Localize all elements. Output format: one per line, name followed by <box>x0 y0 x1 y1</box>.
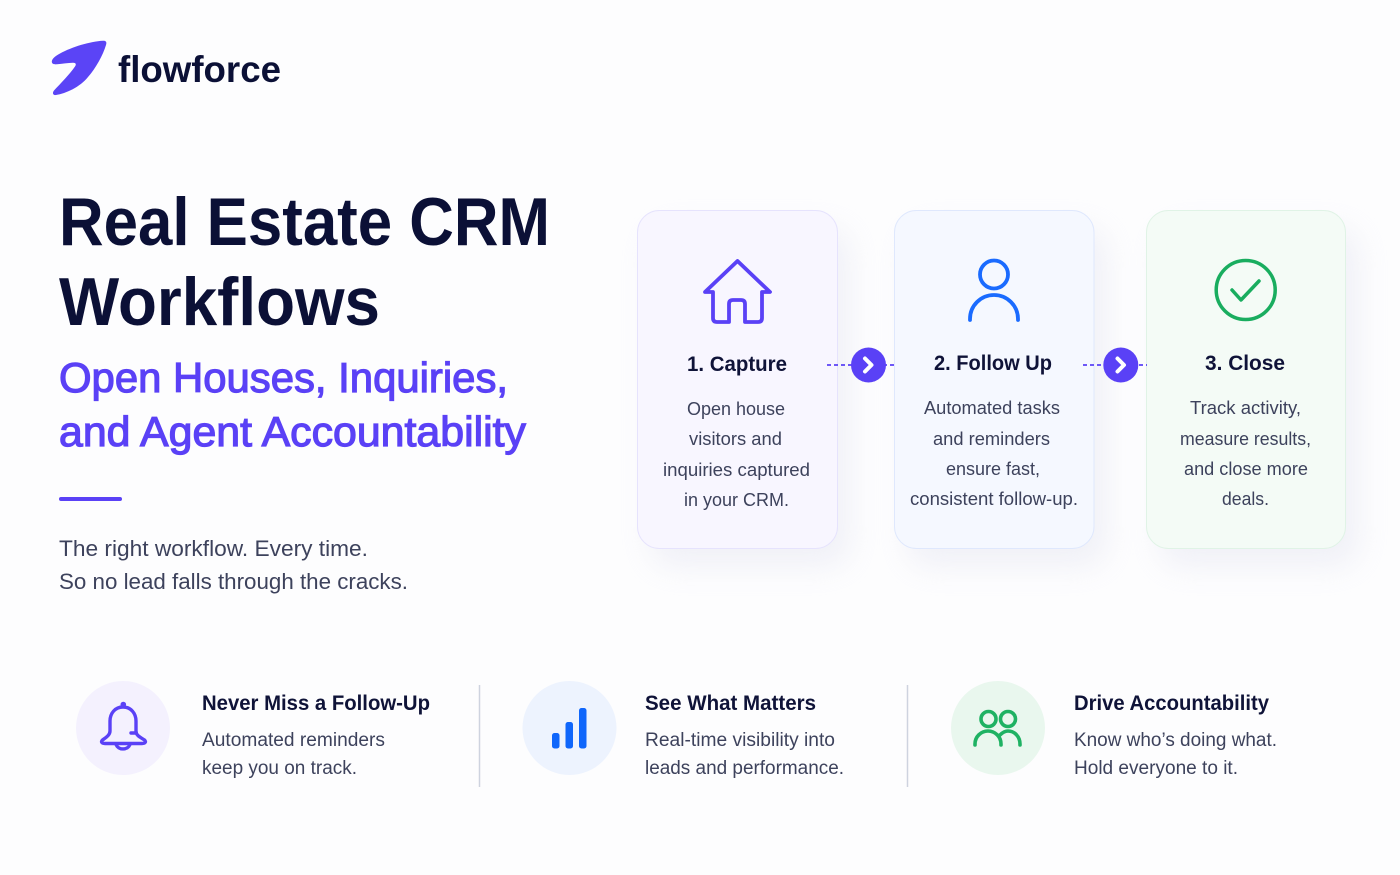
body text: Hold everyone to it. <box>1074 758 1238 779</box>
body text: ensure fast, <box>946 458 1040 479</box>
heading: Never Miss a Follow-Up <box>202 692 430 715</box>
body text: Automated reminders <box>202 730 385 751</box>
tagline: So no lead falls through the cracks. <box>59 569 408 594</box>
body text: and close more <box>1184 458 1308 479</box>
tagline <box>59 536 408 594</box>
benefit: See What Matters <box>522 681 844 779</box>
icon: bell <box>76 681 170 775</box>
body text <box>663 398 810 510</box>
tagline: The right workflow. Every time. <box>59 536 368 561</box>
panel: 3. Close <box>1146 210 1359 567</box>
panel: 1. Capture <box>638 210 850 567</box>
logo: flowforce <box>52 41 281 95</box>
body text: keep you on track. <box>202 758 357 779</box>
body text: leads and performance. <box>645 758 844 779</box>
icon: house <box>705 261 770 322</box>
panel: 2. Follow Up <box>894 210 1107 567</box>
body text: inquiries captured <box>663 459 810 480</box>
body text: in your CRM. <box>684 489 789 510</box>
body text <box>910 397 1078 509</box>
title <box>59 184 550 340</box>
body text: Know who’s doing what. <box>1074 730 1277 751</box>
body text: visitors and <box>689 428 782 449</box>
title: Real Estate CRM <box>59 184 550 260</box>
heading: 1. Capture: 1. Capture <box>687 353 787 376</box>
benefit: Never Miss a Follow-Up <box>76 681 430 779</box>
icon: check circle <box>1216 260 1275 320</box>
heading: See What Matters <box>645 692 816 715</box>
body text: Track activity, <box>1190 397 1301 418</box>
body text <box>202 730 385 779</box>
accent divider <box>59 497 122 501</box>
body text: deals. <box>1222 488 1269 509</box>
arrow: capture to follow up <box>827 348 895 382</box>
subtitle: Open Houses, Inquiries, <box>59 354 508 401</box>
heading: 3. Close: 3. Close <box>1205 352 1285 375</box>
icon: logo swoosh <box>52 41 106 95</box>
heading: 2. Follow Up: 2. Follow Up <box>934 352 1052 375</box>
body text: Open house <box>687 398 785 419</box>
heading: Drive Accountability <box>1074 692 1269 715</box>
body text <box>645 730 844 779</box>
body text: and reminders <box>933 428 1050 449</box>
subtitle <box>59 354 526 455</box>
body text: Real-time visibility into <box>645 730 835 751</box>
logo wordmark: flowforce <box>118 49 281 90</box>
title: Workflows <box>59 264 380 340</box>
benefit: Drive Accountability <box>951 681 1277 779</box>
body text: measure results, <box>1180 428 1311 449</box>
body text: Automated tasks <box>924 397 1060 418</box>
body text <box>1180 397 1311 509</box>
arrow: follow up to close <box>1083 348 1147 382</box>
subtitle: and Agent Accountability <box>59 408 526 455</box>
icon: people <box>951 681 1045 775</box>
icon: person <box>970 260 1018 320</box>
body text: consistent follow-up. <box>910 488 1078 509</box>
icon: bar chart <box>522 681 616 775</box>
body text <box>1074 730 1277 779</box>
